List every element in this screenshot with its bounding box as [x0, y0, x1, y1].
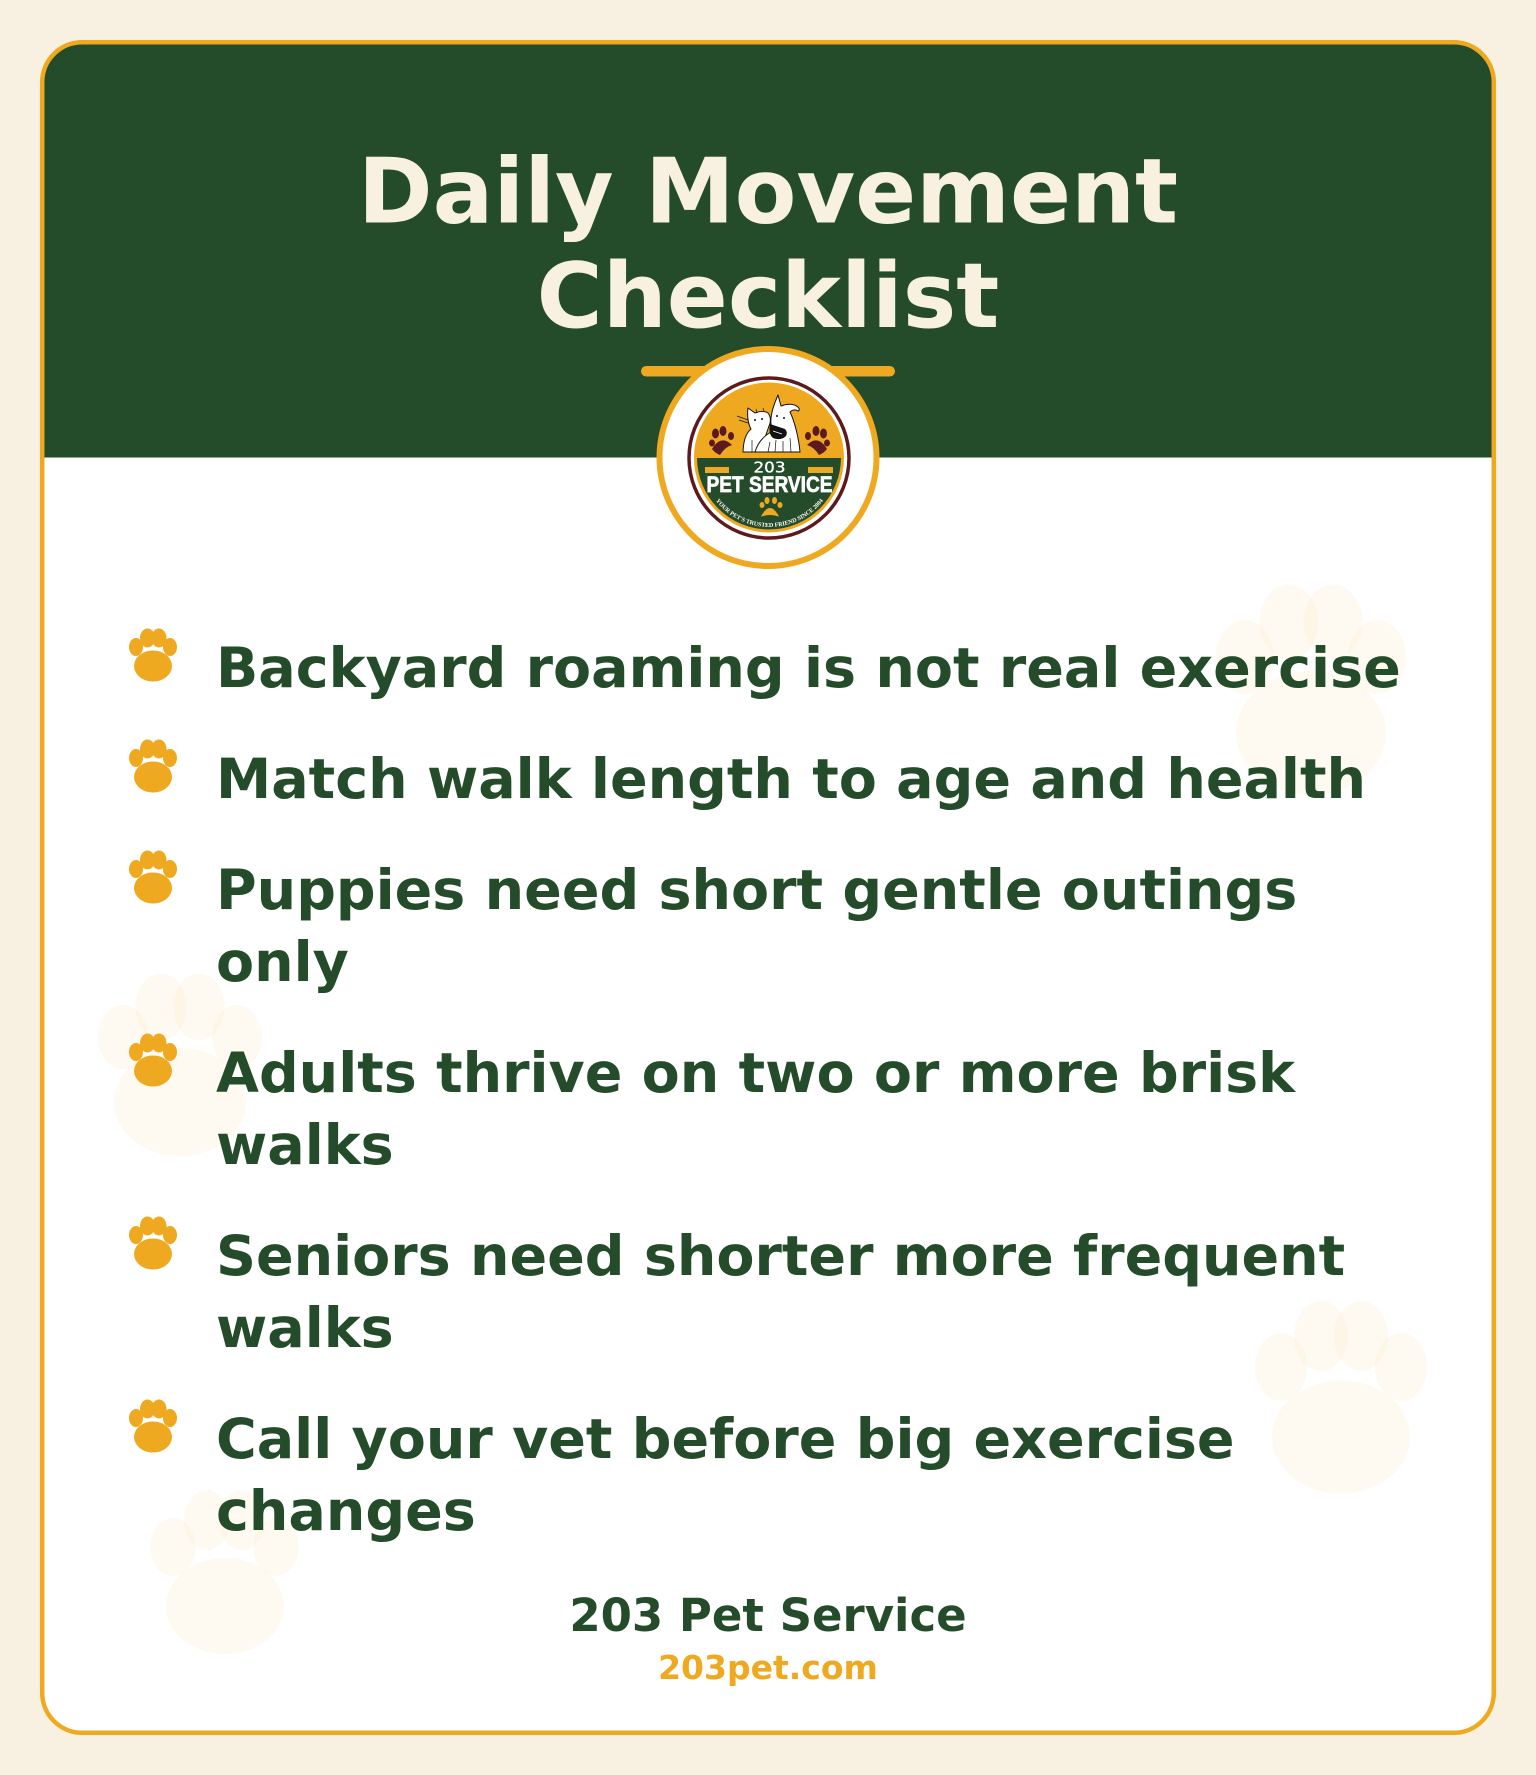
- bullet paw 6: [129, 1400, 177, 1452]
- bullet paw 1: [129, 628, 177, 682]
- title: [358, 140, 1178, 349]
- header band: [42, 42, 1494, 458]
- title: Daily Movement: [358, 140, 1178, 244]
- item 3: Puppies need short gentle outings: [216, 858, 1297, 923]
- item 5: walks: [216, 1296, 394, 1361]
- item 3: [129, 850, 1297, 995]
- watermark paw: bottom left: [150, 1490, 298, 1654]
- logo maroon paws: [709, 426, 830, 455]
- item 6: Call your vet before big exercise: [216, 1407, 1235, 1472]
- checklist: [129, 628, 1401, 1544]
- bullet paw 3: [129, 850, 177, 904]
- item 6: [129, 1400, 1235, 1544]
- logo text pet service: PET SERVICE: [706, 472, 832, 497]
- item 1: Backyard roaming is not real exercise: [216, 636, 1401, 701]
- item 6: changes: [216, 1479, 476, 1544]
- logo green lower panel: [697, 458, 841, 530]
- bullet paw 2: [129, 740, 177, 792]
- logo small amber paw: [760, 497, 782, 515]
- watermark paw: middle left: [98, 974, 262, 1156]
- title: Checklist: [537, 244, 999, 349]
- watermark paw: lower right: [1255, 1301, 1427, 1494]
- logo cat and dog: [737, 395, 800, 452]
- item 5: [129, 1216, 1345, 1361]
- logo rings: [689, 378, 849, 538]
- logo badge: [656, 346, 880, 569]
- logo text 203: 203: [754, 458, 786, 476]
- logo bars: [705, 467, 833, 473]
- item 4: Adults thrive on two or more brisk: [216, 1041, 1296, 1106]
- title underline bar: [641, 366, 895, 376]
- bullet paw 4: [129, 1034, 177, 1086]
- item 4: [129, 1034, 1296, 1178]
- item 4: walks: [216, 1113, 394, 1178]
- footer website: 203pet.com: [658, 1648, 878, 1687]
- footer brand name: 203 Pet Service: [569, 1589, 967, 1642]
- item 5: Seniors need shorter more frequent: [216, 1224, 1345, 1289]
- item 3: only: [216, 930, 349, 995]
- logo curved tagline: YOUR PET'S TRUSTED FRIEND SINCE 2004: [716, 498, 823, 527]
- item 2: Match walk length to age and health: [216, 747, 1366, 812]
- watermark paw: top right: [1216, 584, 1406, 795]
- bullet paw 5: [129, 1216, 177, 1270]
